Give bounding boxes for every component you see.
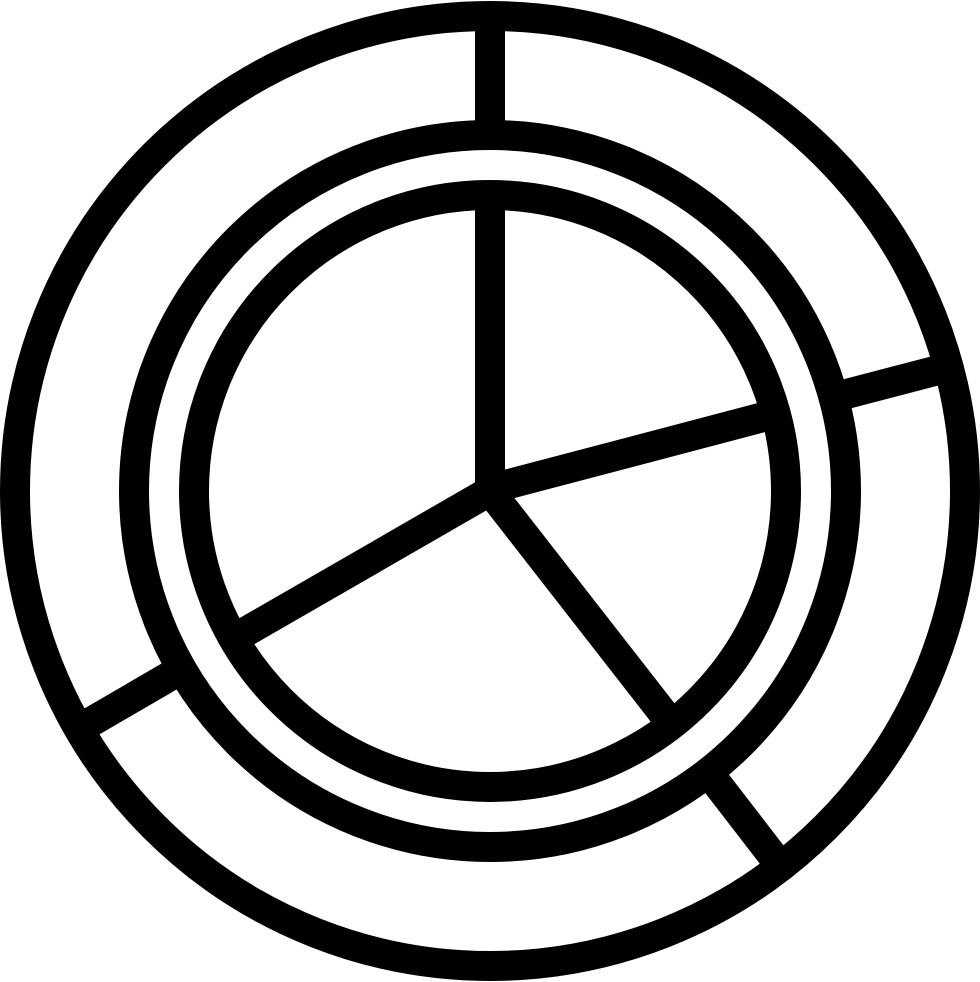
pie spoke: right: [490, 414, 775, 489]
outer divider: right: [835, 367, 950, 397]
outer divider: lower left: [72, 669, 182, 733]
inner pie chart: [194, 195, 786, 787]
outer divider: top: [475, 20, 505, 135]
pie spoke: lower right: [490, 491, 670, 722]
pie spoke: lower left: [235, 491, 490, 638]
middle circle: [134, 135, 846, 847]
pie spoke: top: [475, 200, 505, 491]
outer divider: lower right: [708, 772, 782, 868]
inner circle: [194, 195, 786, 787]
